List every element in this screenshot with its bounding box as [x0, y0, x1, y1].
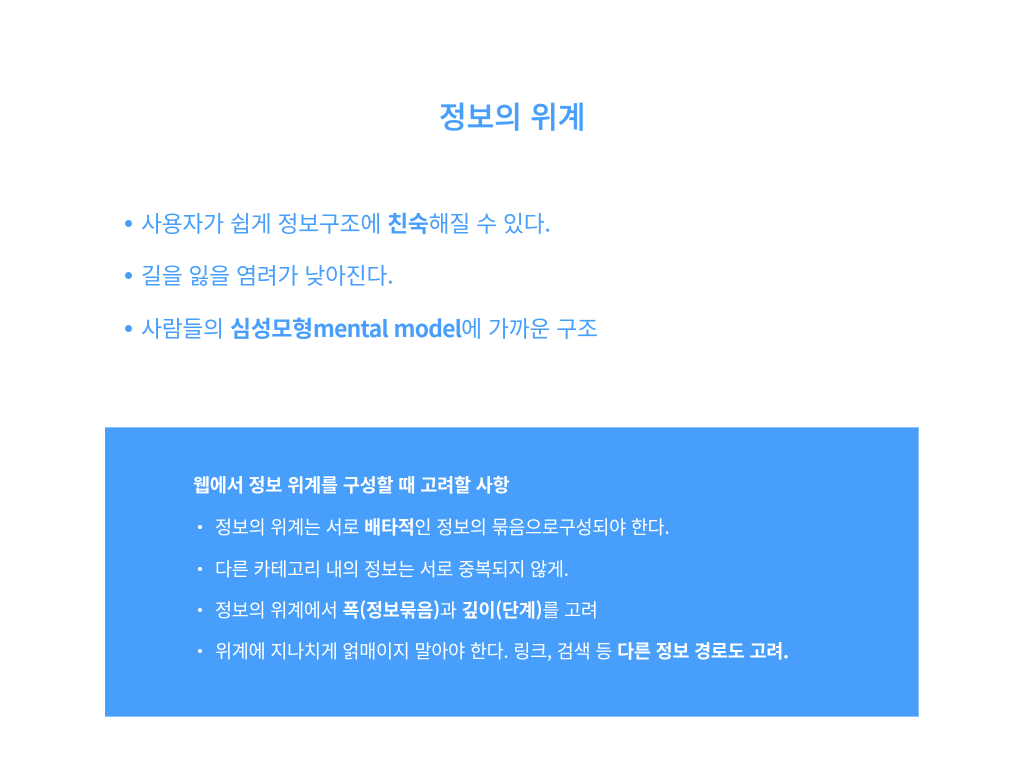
- bullet list: main points: [125, 206, 598, 344]
- bullet item 1: 사용자가 쉽게 정보구조에 친숙해질 수 있다.: [141, 206, 551, 239]
- panel item 4: 위계에 지나치게 얽매이지 말아야 한다. 링크, 검색 등 다른 정보 경로도 고려.: [215, 638, 789, 664]
- bullet item 2: 길을 잃을 염려가 낮아진다.: [141, 258, 393, 291]
- panel: web hierarchy considerations: [105, 427, 919, 717]
- title: 정보의 위계: [439, 93, 585, 137]
- panel item 3: 정보의 위계에서 폭(정보묶음)과 깊이(단계)를 고려: [215, 597, 598, 623]
- bullet item 3: 사람들의 심성모형mental model에 가까운 구조: [141, 311, 598, 344]
- panel heading: 웹에서 정보 위계를 구성할 때 고려할 사항: [193, 472, 510, 498]
- panel item 2: 다른 카테고리 내의 정보는 서로 중복되지 않게.: [215, 556, 569, 582]
- panel item 1: 정보의 위계는 서로 배타적인 정보의 묶음으로구성되야 한다.: [215, 514, 669, 540]
